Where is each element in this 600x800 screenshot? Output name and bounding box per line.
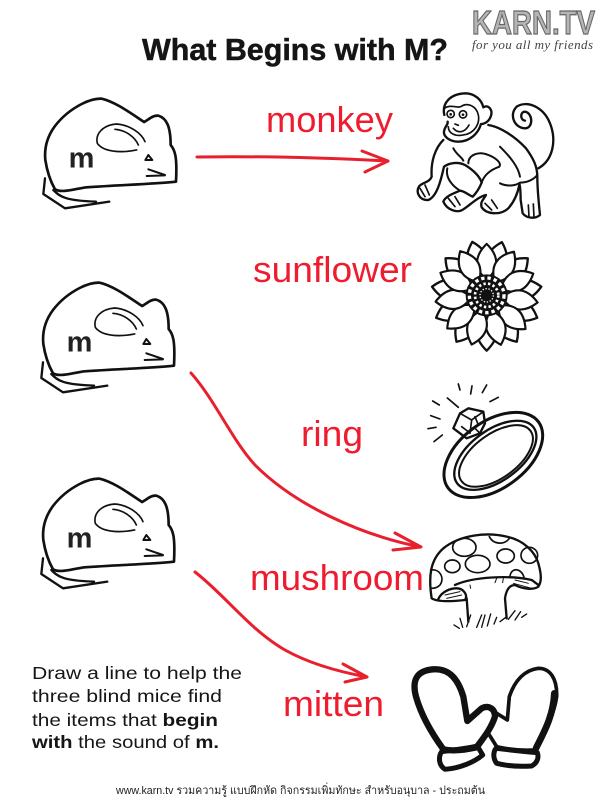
word: sunflower: sunflower [253,249,412,290]
logo: for you all my friends [472,37,593,52]
title: What Begins with M? [142,32,448,67]
footer: www.karn.tv รวมความรู้ แบบฝึกหัด กิจกรรมเพิ่มทักษะ สำหรับอนุบาล - ประถมต้น [115,782,485,797]
mouse 3 [41,479,174,588]
letter m: m [67,326,92,358]
word: monkey: monkey [266,99,393,140]
letter m: m [67,522,92,554]
icon: mittens [415,668,557,769]
icon: sunflower [430,239,543,351]
arrow: mouse 1 to monkey [197,151,388,172]
word: mushroom: mushroom [250,557,424,598]
mouse 2 [41,283,174,392]
instructions: Draw a line to help the [32,663,242,683]
instructions: the items that begin [32,710,218,730]
instructions: three blind mice find [32,686,222,706]
letter m: m [69,142,94,174]
icon: monkey [418,93,553,218]
mouse 1 [43,99,176,208]
icon: mushroom [430,534,541,628]
instructions: with the sound of m. [31,732,219,752]
word: ring: ring [301,413,363,454]
arrow: mouse 3 to mitten [195,572,367,682]
arrow: mouse 2 to mushroom [191,373,421,550]
instructions [31,663,242,752]
word: mitten: mitten [283,683,384,724]
icon: ring [428,384,558,515]
